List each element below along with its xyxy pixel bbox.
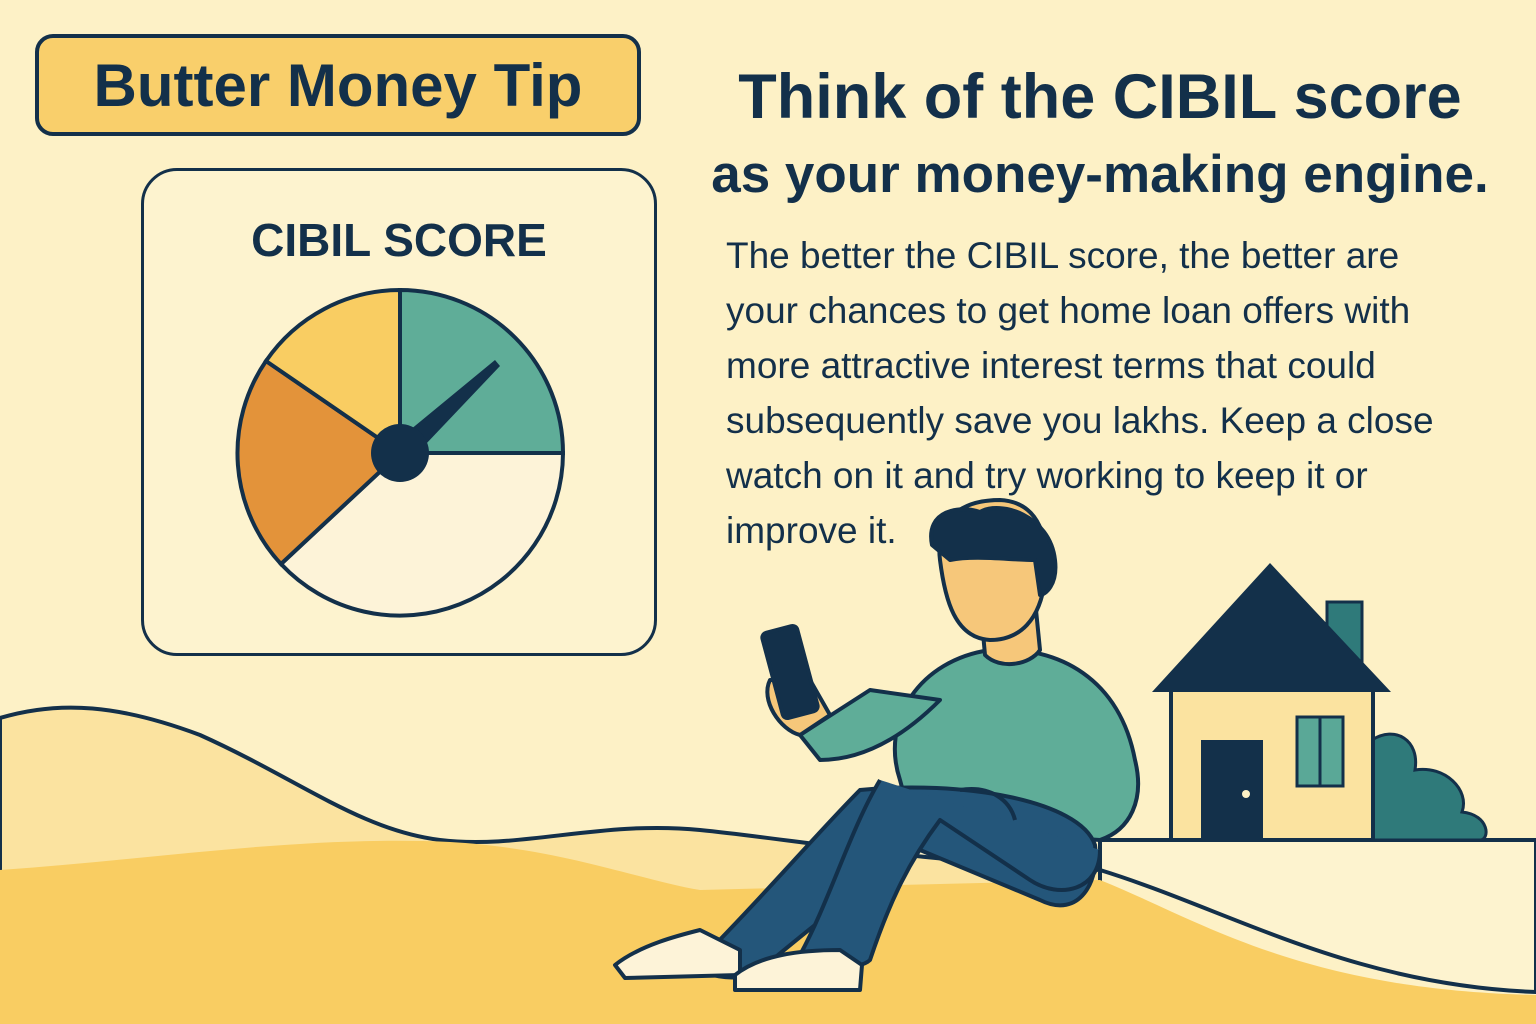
title [711,62,1489,204]
body text: subsequently save you lakhs. Keep a close [726,400,1434,441]
panel: CIBIL score card [141,168,657,656]
body text: watch on it and try working to keep it or [726,455,1368,496]
card heading: CIBIL SCORE [251,214,547,266]
badge: Butter Money Tip: Butter Money Tip [94,52,582,119]
title: Think of the CIBIL score [738,62,1462,132]
badge: Butter Money Tip [35,34,641,136]
title: as your money-making engine. [711,145,1489,204]
body text: your chances to get home loan offers with [726,290,1410,331]
gauge chart [235,288,565,618]
plateau right [1100,840,1536,992]
back hill [0,708,1100,1024]
body text: more attractive interest terms that could [726,345,1376,386]
body text: The better the CIBIL score, the better are [726,235,1399,276]
house [1152,563,1486,840]
person [615,500,1138,990]
foreground yellow hill [0,841,1536,1024]
body text [726,235,1434,551]
body text: improve it. [726,510,897,551]
